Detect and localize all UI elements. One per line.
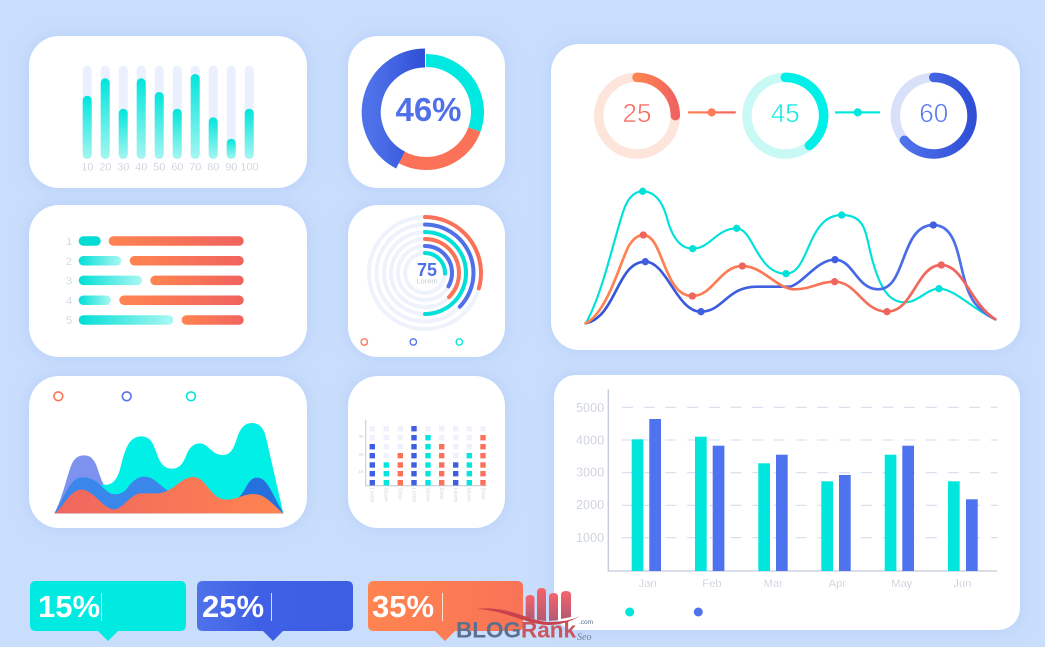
row numbers: 4 — [66, 296, 72, 308]
bar tracks — [83, 66, 254, 159]
blue squares — [370, 426, 458, 485]
teal squares — [384, 435, 472, 485]
legend circles — [54, 392, 195, 401]
y axis labels: 4000 — [576, 434, 604, 448]
bar labels — [81, 162, 259, 174]
callout: 25%: 25% — [202, 589, 264, 624]
panel: grouped bar chart — [554, 375, 1020, 630]
stacked area shapes — [54, 423, 283, 513]
grid lines — [622, 407, 998, 538]
line chart — [586, 188, 995, 323]
month labels: Feb — [702, 578, 722, 590]
watermark bars — [526, 588, 571, 621]
gauge 25 — [599, 77, 675, 154]
gauge 60: 60 — [919, 98, 948, 128]
callout: 15%: 15% — [38, 589, 100, 624]
month labels: May — [891, 578, 913, 590]
watermark swoosh — [476, 608, 580, 625]
x axis labels: Lorem — [369, 488, 375, 502]
bar labels: 20 — [99, 162, 111, 174]
month labels: Jan — [639, 578, 657, 590]
bar labels: 100 — [240, 162, 259, 174]
bar labels: 70 — [189, 162, 201, 174]
y axis labels: 3K — [358, 434, 364, 439]
x axis labels: Dolor — [438, 488, 444, 500]
watermark seo: Seo — [577, 632, 591, 643]
axes — [366, 420, 487, 486]
donut chart — [371, 58, 478, 164]
x axis labels: Dolor — [397, 488, 403, 500]
callout: 35%: 35% — [372, 589, 434, 624]
bar labels: 80 — [207, 162, 219, 174]
x axis labels — [369, 488, 485, 502]
orange squares — [398, 435, 486, 485]
bar labels: 10 — [81, 162, 93, 174]
panel: square dot matrix chart — [348, 376, 505, 528]
legend dots — [625, 608, 703, 616]
callout: 25% — [197, 581, 353, 641]
gauge 25: 25 — [623, 98, 651, 128]
row numbers: 3 — [66, 276, 72, 288]
x axis labels: Ipsum — [466, 488, 472, 502]
teal bars — [79, 236, 173, 325]
watermark name: BLOGRank — [456, 618, 577, 642]
row numbers: 1 — [66, 236, 72, 248]
x axis labels: Lorem — [410, 488, 416, 502]
y axis labels: 5000 — [576, 401, 604, 415]
center caption: Lorem — [416, 276, 438, 286]
month labels — [639, 578, 971, 590]
panel: donut 46% — [348, 36, 505, 188]
y axis labels: 2K — [358, 452, 364, 457]
month labels: Mar — [764, 578, 783, 590]
legend circles — [361, 339, 462, 345]
background rings — [369, 217, 481, 329]
y axis labels — [358, 434, 364, 474]
row numbers: 5 — [66, 315, 72, 327]
month labels: Jun — [953, 578, 971, 590]
row numbers: 2 — [66, 256, 72, 268]
month labels: Apr — [829, 578, 846, 590]
gauge 45: 45 — [771, 98, 800, 128]
panel: area chart — [29, 376, 307, 528]
panel: gauges and line chart — [551, 44, 1020, 350]
bar labels: 40 — [135, 162, 147, 174]
connector teal — [835, 108, 880, 116]
gauge 45 — [747, 77, 824, 154]
bars — [83, 74, 254, 159]
bar labels: 60 — [171, 162, 183, 174]
blue points — [642, 221, 937, 315]
blue bars — [649, 419, 978, 571]
x axis labels: Dolor — [479, 488, 485, 500]
x axis labels: Lorem — [452, 488, 458, 502]
teal points — [639, 188, 943, 292]
x axis labels: Ipsum — [424, 488, 430, 502]
coloured arcs — [369, 217, 481, 329]
teal bars — [632, 437, 960, 571]
x axis labels: Ipsum — [383, 488, 389, 502]
y axis labels: 3000 — [576, 466, 604, 480]
y axis labels: 2000 — [576, 498, 604, 512]
y axis labels — [576, 401, 604, 545]
panel: radial rings — [348, 205, 505, 357]
bar labels: 30 — [117, 162, 129, 174]
panel: vertical bar chart — [29, 36, 307, 188]
orange points — [640, 231, 945, 315]
watermark domain: .com — [579, 619, 593, 626]
inactive squares — [370, 426, 486, 458]
orange bars — [109, 236, 244, 325]
axes — [608, 389, 997, 571]
bar labels: 90 — [225, 162, 237, 174]
bar labels: 50 — [153, 162, 165, 174]
value: 46% — [395, 91, 462, 128]
center value: 75 — [417, 260, 437, 280]
row numbers — [66, 236, 72, 327]
panel: horizontal progress bars — [29, 205, 307, 357]
callout: 15% — [30, 581, 186, 641]
y axis labels: 1K — [358, 469, 364, 474]
connector orange — [688, 108, 736, 116]
callout: 35% — [368, 581, 523, 641]
y axis labels: 1000 — [576, 531, 604, 545]
watermark logo — [456, 588, 593, 643]
gauge 60 — [895, 77, 972, 154]
